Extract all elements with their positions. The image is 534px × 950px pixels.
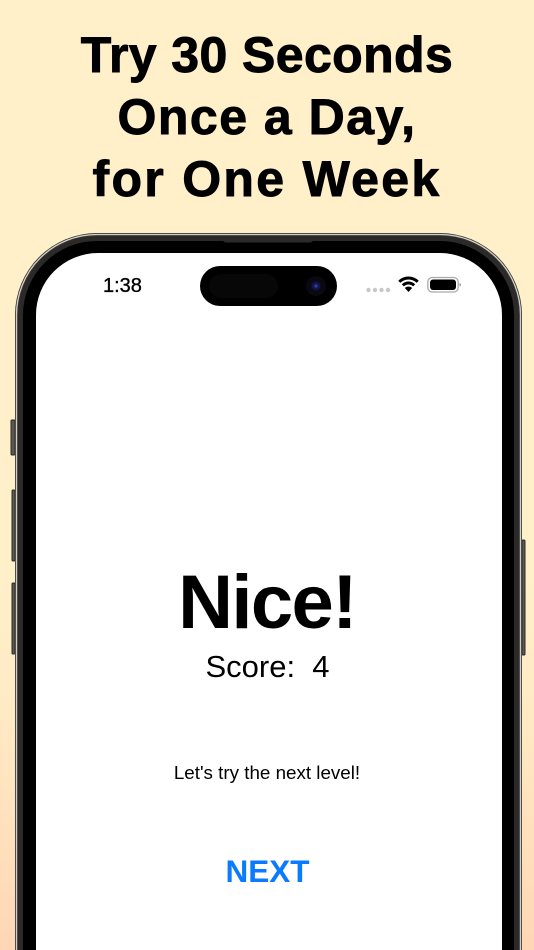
side buttons xyxy=(11,420,525,655)
title: Try 30 Seconds xyxy=(81,27,453,83)
message: Let's try the next level! xyxy=(174,762,360,783)
title xyxy=(80,27,453,207)
icon: battery xyxy=(428,278,461,292)
icon: wifi xyxy=(399,278,418,292)
signal dots xyxy=(366,288,390,292)
next button: NEXT xyxy=(225,853,310,889)
status time: 1:38 xyxy=(103,275,142,297)
title: for One Week xyxy=(92,151,442,207)
heading: Nice!: Nice! xyxy=(178,560,356,645)
score: Score: 4 xyxy=(205,649,330,684)
dynamic island xyxy=(200,266,337,306)
title: Once a Day, xyxy=(117,89,417,145)
phone frame xyxy=(15,233,522,950)
screen xyxy=(36,253,502,950)
speaker notch xyxy=(222,240,314,242)
